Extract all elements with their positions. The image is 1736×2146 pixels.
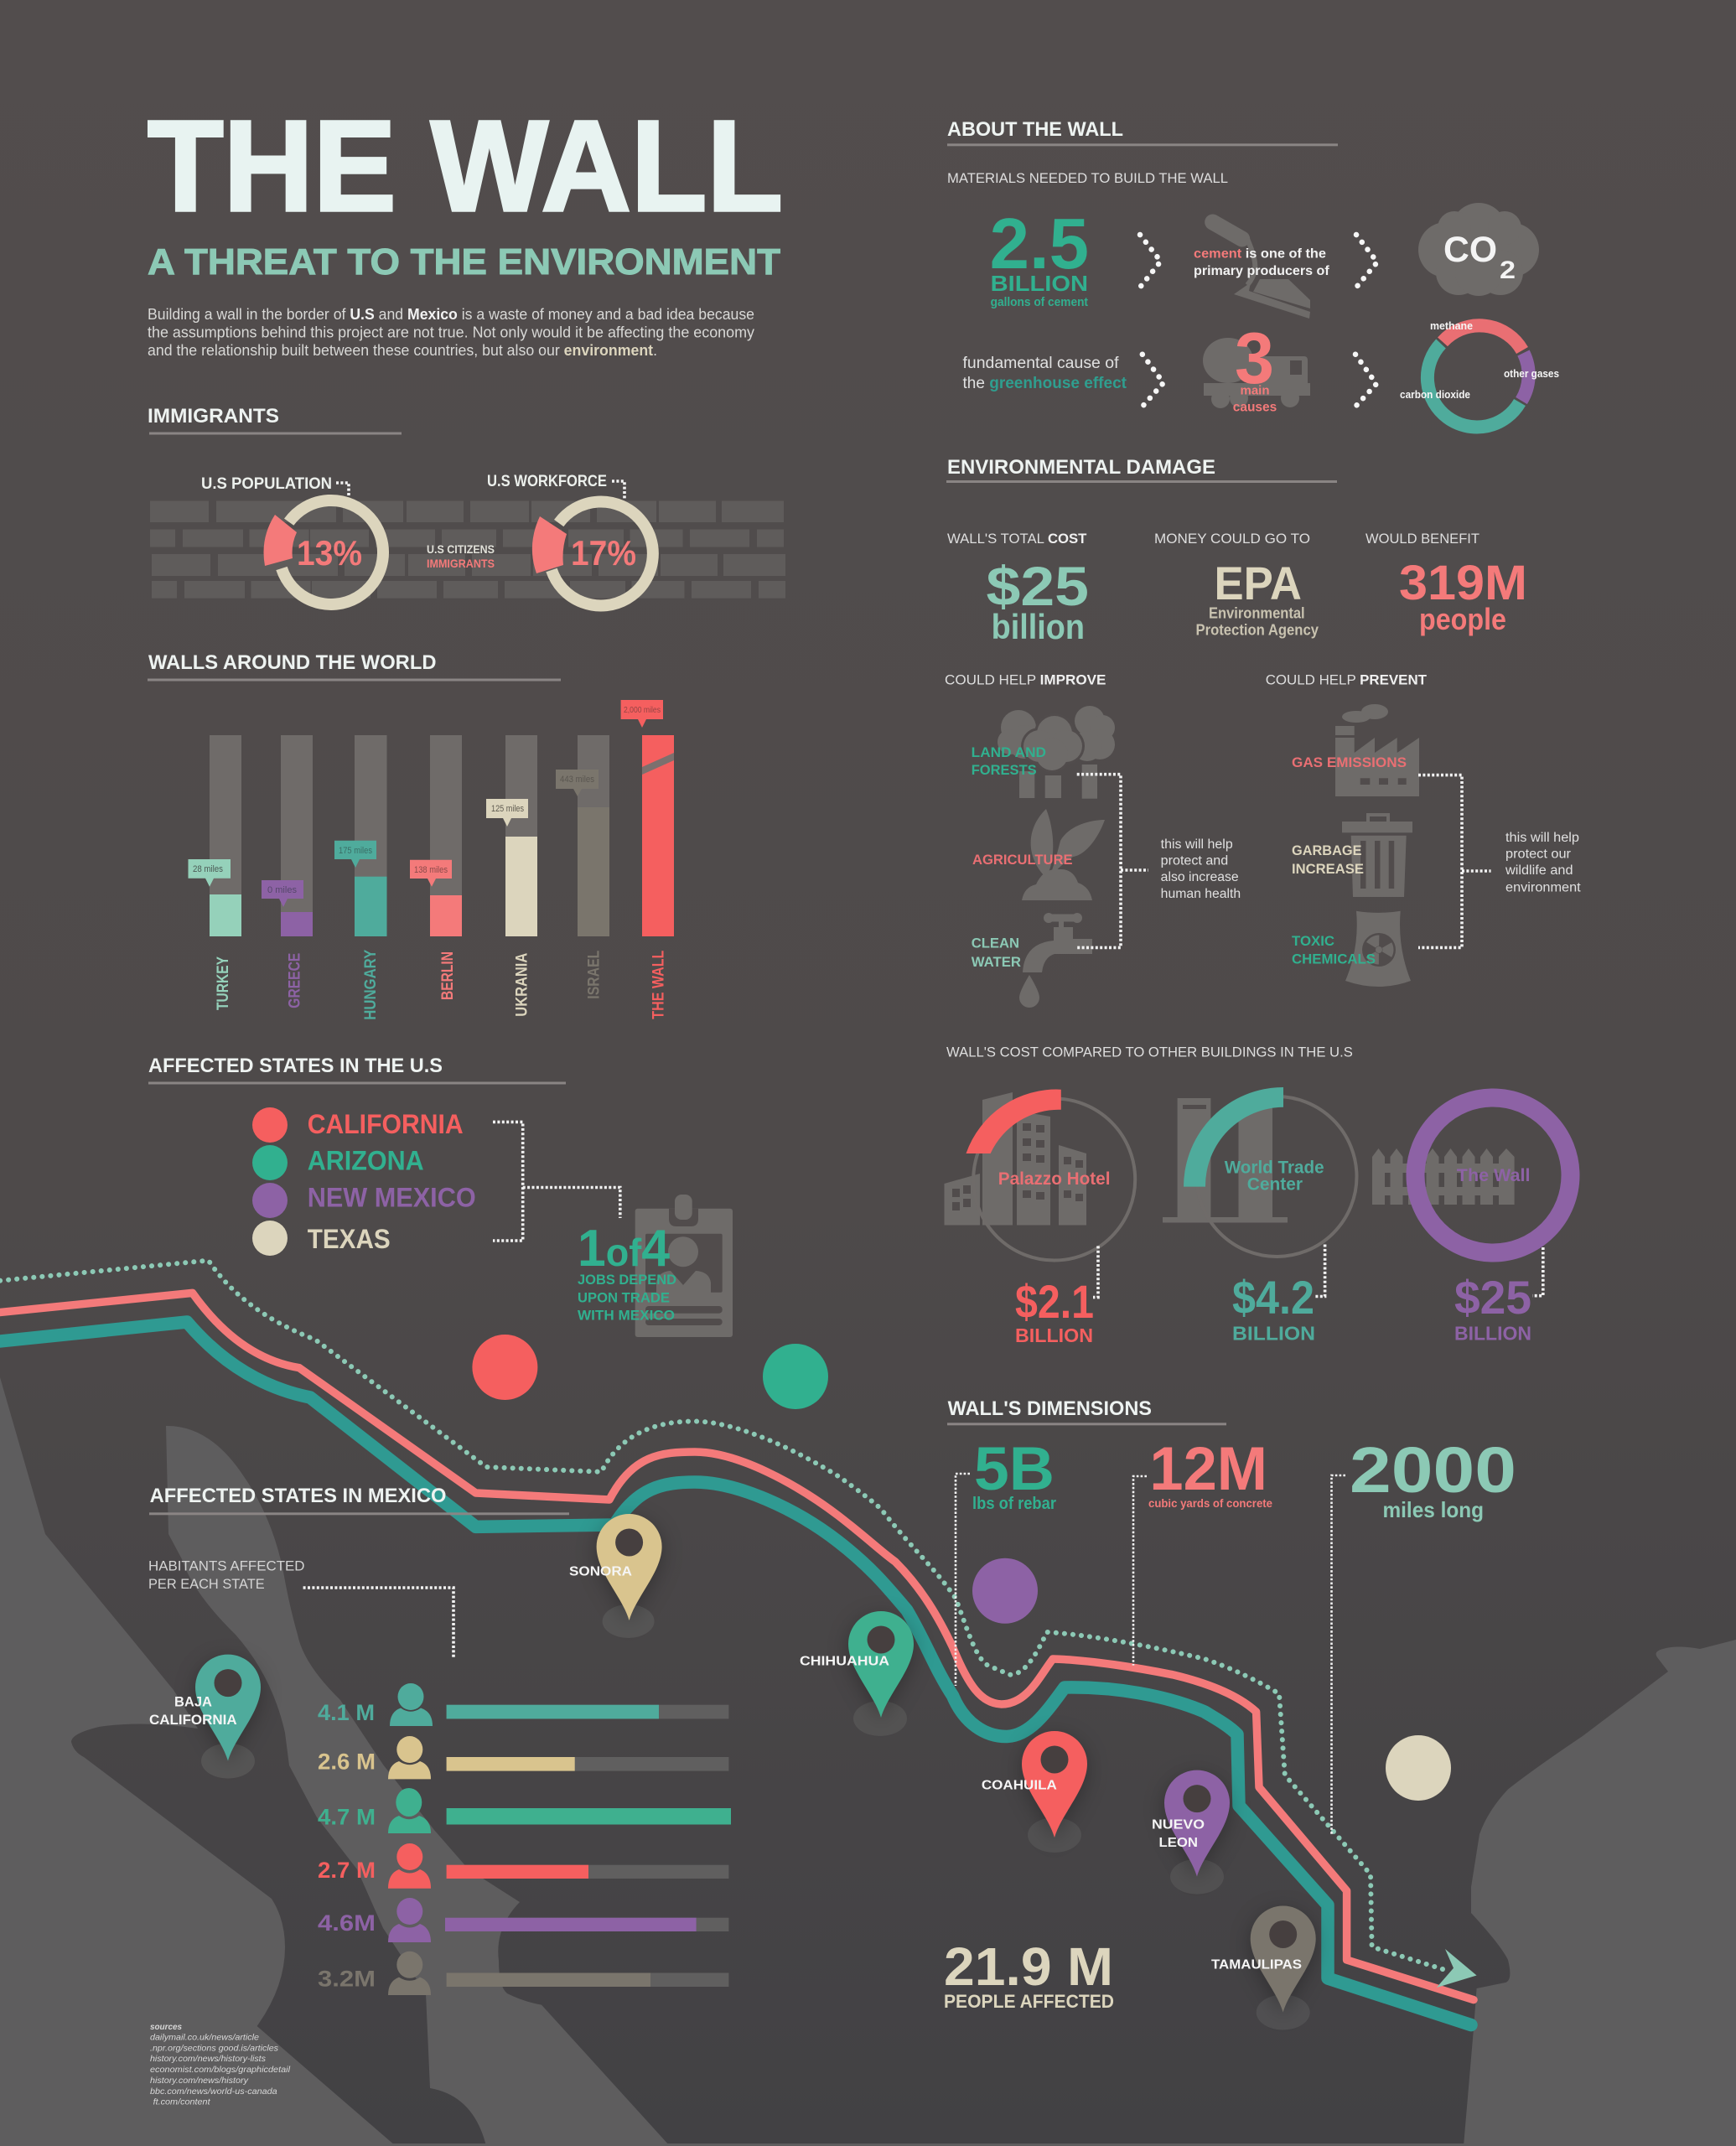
subheading: cost compared: WALL'S COST COMPARED TO OTHER BUILDINGS IN THE U.S (946, 1044, 1353, 1060)
text: improve note: also increase (1161, 870, 1239, 884)
bar: Greece: 0 miles (267, 885, 298, 895)
map: land shapes (0, 1377, 1736, 2146)
heading: walls around the world: WALLS AROUND THE WORLD (148, 651, 436, 674)
donut: 13 percent: 13% (297, 533, 362, 573)
stat: 319M people: people (1419, 602, 1506, 636)
bar: Berlin: BERLIN (438, 951, 457, 1000)
labels: improve items (972, 744, 1073, 970)
stat: 4.2 billion: $4.2 (1232, 1271, 1314, 1324)
stat: 25 billion: $25 (1454, 1271, 1531, 1324)
stat: 2.5 billion: 2.5 (990, 205, 1089, 284)
sources: history.com/news/history (150, 2076, 249, 2086)
sources: sources (150, 2022, 182, 2032)
map dot: green (763, 1344, 828, 1409)
pin: Sonora: SONORA (569, 1564, 632, 1579)
stat: 5B rebar: lbs of rebar (972, 1495, 1056, 1513)
icon: trash can (1342, 815, 1412, 897)
row: 4.1 M: 4.1 M (318, 1700, 375, 1725)
intro text (148, 305, 755, 359)
bar: Turkey: TURKEY (214, 956, 232, 1010)
icon: CO2 cloud: CO (1443, 230, 1497, 270)
stat: 319M people (1365, 531, 1527, 636)
stat: 3 main causes: main (1240, 384, 1270, 398)
stat: 3 main causes: 3 (1235, 319, 1274, 399)
icon: cement truck (1203, 338, 1310, 408)
arrow: chevron 3 (1143, 355, 1163, 407)
state: Arizona: ARIZONA (308, 1145, 424, 1175)
donut: greenhouse gases (1400, 319, 1559, 427)
panel: wall's dimensions (947, 1397, 1516, 1834)
heading: affected states U.S: AFFECTED STATES IN THE U.S (148, 1055, 443, 1077)
gauge: World Trade Center (1184, 1087, 1356, 1257)
pin: Tamaulipas (1211, 1906, 1316, 2030)
row: 2.6 M (318, 1736, 728, 1779)
heading: about the wall: ABOUT THE WALL (947, 118, 1123, 141)
bar: Ukrania (486, 735, 537, 1017)
pin: Nuevo Leon (1152, 1770, 1230, 1895)
map dot: cream (1386, 1735, 1451, 1801)
gauge: Palazzo Hotel (966, 1090, 1135, 1261)
pin: Chihuahua: CHIHUAHUA (800, 1655, 889, 1669)
labels: improve items: LAND AND (972, 744, 1046, 760)
pin: Nuevo Leon: LEON (1158, 1836, 1198, 1850)
row: 4.6M (318, 1898, 728, 1942)
map dot: purple (972, 1558, 1038, 1624)
bar: Turkey: 28 miles (193, 864, 223, 874)
stat: total cost: WALL'S TOTAL COST (947, 531, 1087, 547)
pin: Coahuila (982, 1731, 1087, 1853)
icon: hotel buildings (944, 1092, 1086, 1226)
map dot: red (472, 1335, 537, 1400)
title: THE WALL (148, 94, 783, 238)
text: improve note (1161, 837, 1241, 901)
donut: 17 percent (532, 501, 653, 605)
icon: water tap (1019, 913, 1092, 1008)
labels: improve items: AGRICULTURE (972, 852, 1073, 868)
bar: Israel: ISRAEL (585, 951, 604, 999)
bar: The Wall: THE WALL (649, 951, 667, 1019)
icon: trees (998, 706, 1115, 799)
sources: bbc.com/news/world-us-canada (150, 2086, 277, 2097)
stat: 2000 miles: 2000 (1350, 1434, 1516, 1506)
pin: Tamaulipas: TAMAULIPAS (1211, 1958, 1302, 1972)
row: 2.6 M: 2.6 M (318, 1749, 376, 1775)
pin: Baja California: CALIFORNIA (149, 1712, 237, 1728)
text: prevent note: protect our (1505, 848, 1571, 862)
stat: 2000 miles: miles long (1383, 1497, 1484, 1522)
gauge: The Wall (1415, 1098, 1571, 1252)
donut: greenhouse gases: methane (1430, 319, 1473, 332)
intro text: the assumptions behind this project are not true. Not only would it be affecting the economy (148, 324, 755, 340)
gauge: Palazzo Hotel: Palazzo Hotel (998, 1169, 1110, 1189)
row: 3.2M: 3.2M (318, 1967, 376, 1992)
stat: EPA (1154, 531, 1319, 639)
stat: 4.2 billion: BILLION (1232, 1323, 1315, 1345)
state: New Mexico: NEW MEXICO (308, 1183, 476, 1213)
sources: economist.com/blogs/graphicdetail (150, 2065, 291, 2075)
bar: The Wall: 2,000 miles (624, 705, 661, 715)
sources: .npr.org/sections good.is/articles (150, 2044, 279, 2054)
stat: 1 of 4 (578, 1220, 676, 1323)
gauge: World Trade Center: World Trade (1225, 1159, 1324, 1177)
subheading: could help improve: COULD HELP IMPROVE (945, 672, 1106, 688)
labels: prevent items: CHEMICALS (1292, 951, 1376, 967)
stat: 12M concrete: cubic yards of concrete (1148, 1496, 1272, 1510)
stat: total cost: $25 (986, 555, 1089, 617)
stat: 2.5 billion: BILLION (991, 271, 1088, 296)
subtitle: A THREAT TO THE ENVIRONMENT (148, 241, 780, 283)
icon: CO2 cloud (1418, 203, 1539, 296)
labels: improve items: WATER (972, 954, 1021, 970)
bar: Hungary: 175 miles (339, 846, 372, 856)
bar: Greece: GREECE (286, 953, 304, 1008)
icon: trowel (1213, 222, 1310, 319)
text: prevent note: environment (1505, 880, 1581, 895)
stat: EPA: Environmental (1209, 605, 1305, 622)
bar: The Wall (621, 700, 674, 1019)
icon: CO2 cloud: 2 (1500, 257, 1516, 284)
icon: ID badge (635, 1195, 733, 1337)
sources (150, 2022, 291, 2107)
stat: 21.9 M people affected: 21.9 M (944, 1936, 1113, 1997)
labels: prevent items: INCREASE (1292, 861, 1364, 877)
subheading: habitants affected: PER EACH STATE (148, 1576, 265, 1592)
icon: factory (1335, 704, 1419, 796)
labels: prevent items: GAS EMISSIONS (1292, 754, 1407, 770)
stat: 319M people: WOULD BENEFIT (1365, 531, 1479, 547)
panel: cost comparison (944, 1044, 1571, 1346)
gauge: The Wall: The Wall (1457, 1166, 1531, 1185)
stat: 2.1 billion (1015, 1275, 1094, 1346)
state: California: CALIFORNIA (308, 1109, 464, 1139)
bar: Berlin: 138 miles (414, 865, 448, 875)
heading: dimensions: WALL'S DIMENSIONS (948, 1397, 1152, 1420)
stat: 3 main causes: causes (1233, 401, 1277, 415)
stat: total cost: billion (992, 607, 1085, 646)
panel: affected states in Mexico (148, 1485, 731, 1995)
stat: 1 of 4: WITH MEXICO (578, 1308, 675, 1323)
donut: 13 percent (263, 500, 383, 604)
text: improve note: this will help (1161, 837, 1233, 852)
row: 4.7 M (318, 1788, 731, 1833)
text: cement: cement is one of the (1194, 246, 1326, 262)
arrow: chevron 2 (1356, 235, 1377, 288)
border: dotted route (0, 1261, 1445, 1970)
stat: 4.2 billion (1232, 1271, 1315, 1345)
text: improve note: protect and (1161, 853, 1228, 868)
intro text: Building a wall in the border of U.S and Mexico is a waste of money and a bad idea because (148, 305, 754, 323)
bar: Israel: 443 miles (560, 775, 594, 785)
subheading: could help prevent: COULD HELP PREVENT (1266, 672, 1428, 688)
pin: Coahuila: COAHUILA (982, 1779, 1057, 1792)
state: Texas: TEXAS (308, 1224, 391, 1254)
legend: citizens and immigrants: U.S CITIZENS (427, 543, 495, 556)
panel: environmental damage (945, 456, 1581, 1008)
icon: cooling tower (1345, 911, 1411, 987)
panel: affected states in the U.S (148, 1055, 733, 1337)
arrow: chevron 4 (1355, 355, 1376, 407)
text: cement: primary producers of (1194, 264, 1329, 278)
row: 4.6M: 4.6M (318, 1910, 376, 1936)
row: 4.1 M (318, 1683, 728, 1726)
text: cement (1194, 246, 1329, 278)
donut: 17 percent: 17% (571, 533, 636, 573)
text: greenhouse effect: fundamental cause of (962, 355, 1119, 372)
bar: Ukrania: UKRANIA (513, 953, 531, 1017)
subheading: materials: MATERIALS NEEDED TO BUILD THE WALL (947, 170, 1228, 186)
stat: 1 of 4: JOBS DEPEND (578, 1272, 676, 1288)
legend: citizens and immigrants: IMMIGRANTS (427, 557, 495, 570)
stat: 2.1 billion: BILLION (1015, 1324, 1093, 1346)
bar: Greece (262, 735, 313, 1008)
donut: greenhouse gases: carbon dioxide (1400, 388, 1470, 401)
stat: 25 billion: BILLION (1454, 1323, 1531, 1345)
pin: Sonora (569, 1514, 662, 1638)
stat: 21.9 M people affected: PEOPLE AFFECTED (944, 1991, 1114, 2012)
border: teal line (0, 1322, 1471, 2025)
text: greenhouse effect (962, 355, 1127, 392)
stat: 2.5 billion: gallons of cement (991, 296, 1088, 309)
sources: history.com/news/history-lists (150, 2054, 267, 2064)
bar: Hungary (334, 735, 387, 1020)
row: 2.7 M: 2.7 M (318, 1858, 376, 1883)
stat: 319M people: 319M (1399, 556, 1527, 610)
label: U.S workforce: U.S WORKFORCE (487, 473, 607, 490)
sources: ft.com/content (153, 2097, 211, 2107)
state: New Mexico (252, 1183, 476, 1218)
labels: prevent items: GARBAGE (1292, 842, 1361, 858)
panel: immigrants (148, 405, 785, 605)
arrow head (1437, 1949, 1477, 1988)
text: prevent note: wildlife and (1505, 863, 1573, 878)
stat: EPA: MONEY COULD GO TO (1154, 531, 1310, 547)
subheading: habitants affected: HABITANTS AFFECTED (148, 1558, 305, 1574)
stat: 12M concrete: 12M (1149, 1435, 1267, 1503)
donut: greenhouse gases: other gases (1504, 367, 1559, 380)
gauge: World Trade Center: Center (1247, 1174, 1303, 1194)
text: prevent note (1505, 831, 1581, 895)
border: pink line (0, 1293, 1474, 2000)
heading: affected states Mexico: AFFECTED STATES IN MEXICO (150, 1485, 446, 1507)
subheading: habitants affected (148, 1558, 305, 1592)
text: improve note: human health (1161, 887, 1241, 901)
state: Arizona (252, 1145, 424, 1180)
bar: Hungary: HUNGARY (361, 950, 380, 1020)
stat: 5B rebar: 5B (974, 1435, 1055, 1503)
row: 3.2M (318, 1952, 728, 1995)
icon: plant (1022, 809, 1105, 900)
bar: Israel (556, 735, 609, 999)
legend: citizens and immigrants (427, 543, 495, 570)
sources: dailymail.co.uk/news/article (150, 2033, 259, 2043)
state: California (252, 1107, 464, 1143)
heading: immigrants: IMMIGRANTS (148, 405, 279, 428)
intro text: and the relationship built between these countries, but also our environment. (148, 341, 657, 359)
stat: EPA: Protection Agency (1195, 622, 1319, 639)
label: U.S population: U.S POPULATION (201, 475, 332, 493)
pin: Baja California (149, 1655, 261, 1779)
panel: about the wall (947, 118, 1559, 427)
stat: 1 of 4: UPON TRADE (578, 1290, 670, 1306)
pin: Chihuahua (800, 1611, 914, 1736)
text: prevent note: this will help (1505, 831, 1579, 845)
row: 2.7 M (318, 1843, 728, 1889)
bar: Berlin (410, 735, 462, 1000)
icon: twin towers (1163, 1098, 1288, 1222)
bar: Turkey (188, 735, 241, 1010)
labels: prevent items: TOXIC (1292, 933, 1334, 949)
stat: 1 of 4: 1of4 (578, 1220, 671, 1278)
stat: 2.1 billion: $2.1 (1015, 1275, 1094, 1328)
brick wall (150, 501, 785, 599)
state: Texas (252, 1221, 391, 1256)
pin: Baja California: BAJA (174, 1694, 212, 1710)
text: greenhouse effect: the greenhouse effect (962, 375, 1127, 392)
arrow: chevron 1 (1140, 235, 1161, 288)
stat: total cost (947, 531, 1089, 646)
icon: fence (1372, 1148, 1515, 1205)
heading: environmental damage: ENVIRONMENTAL DAMAGE (947, 456, 1215, 479)
stat: EPA: EPA (1214, 557, 1302, 609)
pin: Nuevo Leon: NUEVO (1152, 1818, 1205, 1832)
labels: prevent items (1292, 754, 1407, 967)
row: 4.7 M: 4.7 M (318, 1804, 376, 1829)
labels: improve items: FORESTS (972, 762, 1037, 778)
bar: Ukrania: 125 miles (491, 804, 524, 814)
panel: walls around the world (148, 651, 674, 1020)
labels: improve items: CLEAN (972, 935, 1019, 951)
